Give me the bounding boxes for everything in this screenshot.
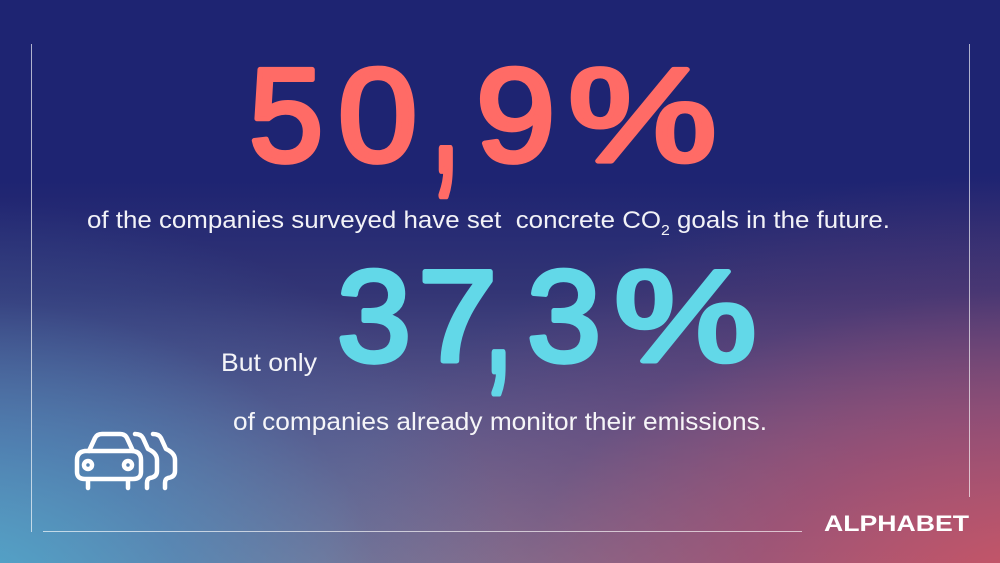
statistic: 50,9%: 5: [249, 41, 323, 190]
statistic: 50,9%: 9: [476, 41, 555, 190]
text: companies with CO2 goals: of the companies surveyed have set concrete CO: [87, 207, 630, 234]
icon: row of cars: [77, 434, 175, 488]
statistic: 37,3%: %: [614, 244, 757, 389]
statistic: 50,9%: 0: [338, 41, 417, 190]
statistic: 37,3%: ,: [484, 216, 513, 409]
statistic: 50,9%: [249, 0, 717, 212]
statistic: 50,9%: %: [568, 41, 717, 190]
statistic: 37,3%: 3: [337, 243, 411, 389]
statistic: 37,3%: [337, 216, 757, 409]
text: companies with CO2 goals: 2: [661, 222, 670, 239]
logo: Alphabet: ALPHABET: [824, 511, 970, 536]
text: but only: But only: [221, 349, 318, 377]
statistic: 37,3%: 7: [418, 244, 497, 389]
statistic: 37,3%: 3: [527, 243, 601, 389]
text: companies monitoring emissions: of companies already monitor their emissions.: [233, 408, 767, 436]
text: companies with CO2 goals: goals in the future.: [670, 207, 890, 234]
